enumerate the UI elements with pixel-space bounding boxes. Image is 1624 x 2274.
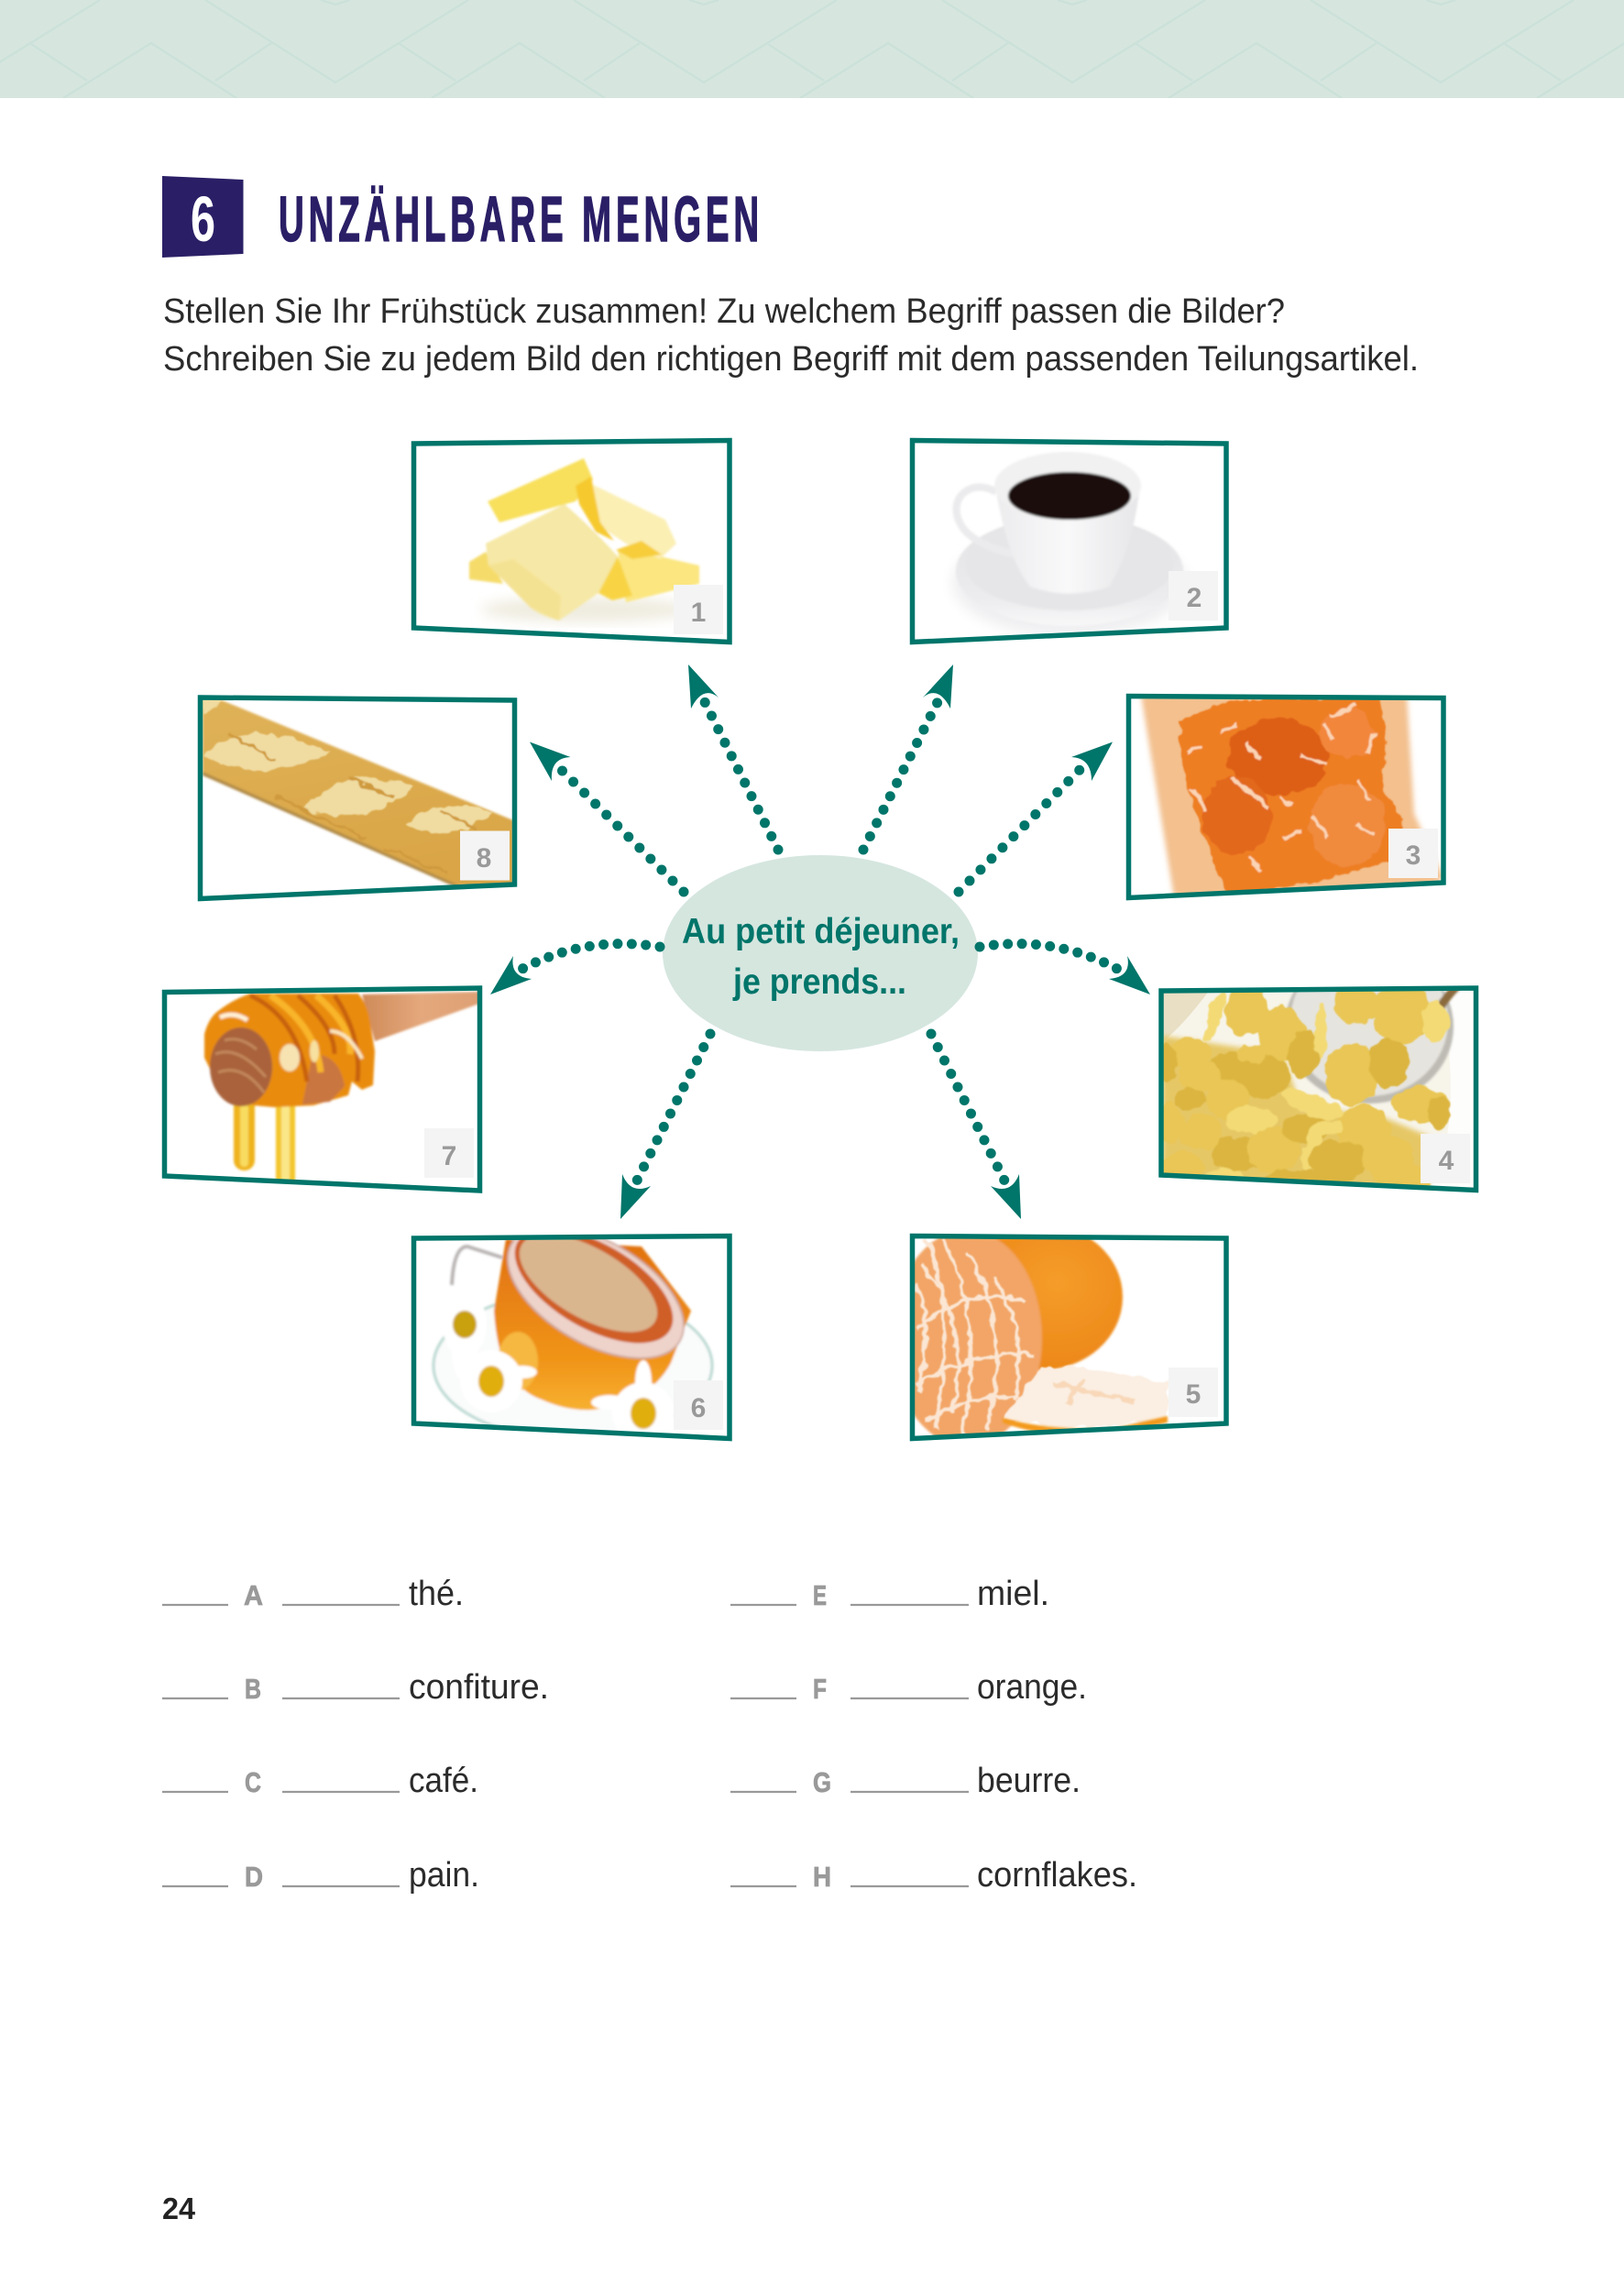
answer row B: B [245,1673,261,1705]
heading: UNZÄHLBARE MENGEN [279,183,759,255]
answer row F: F [813,1673,827,1705]
answer row G: beurre. [977,1762,1081,1800]
arrow to picture 3 [959,742,1113,892]
number tag 4 [1421,1134,1470,1183]
answer row G [730,1762,1081,1800]
central bubble [663,855,978,1051]
answer row D: pain. [409,1856,479,1895]
central bubble: je prends... [732,962,906,1002]
header band [0,0,1624,98]
answer row D: D [245,1861,263,1893]
answer row E: miel. [977,1575,1049,1613]
instructions: Stellen Sie Ihr Frühstück zusammen! Zu welchem Begriff passen die Bilder? [163,292,1285,331]
number tag 6: 6 [691,1393,706,1423]
number tag 4: 4 [1439,1146,1454,1176]
number tag 2: 2 [1187,583,1202,613]
answer row C: café. [409,1762,478,1800]
picture 4: cornflakes [1158,985,1479,1193]
picture 5: orange [909,1234,1229,1441]
number tag 8 [460,830,510,880]
answer row H: cornflakes. [977,1856,1137,1895]
arrow to picture 5 [931,1034,1021,1219]
number tag 3 [1388,829,1438,878]
exercise number badge: 6 [191,183,215,255]
answer row D [162,1856,479,1895]
answer row F: orange. [977,1668,1087,1707]
number tag 7 [424,1128,474,1178]
answer row C [162,1762,478,1800]
arrow to picture 7 [490,944,660,994]
picture 6: tea with daisies [411,1234,732,1441]
answer row C: C [245,1766,261,1798]
arrow to picture 6 [620,1034,710,1219]
answer row B: confiture. [409,1668,549,1707]
answer row F [730,1668,1087,1707]
exercise number badge [162,176,244,258]
picture 7: honey dipper [165,988,480,1191]
answer row H [730,1856,1137,1895]
number tag 7: 7 [442,1141,456,1171]
number tag 1: 1 [691,598,706,628]
answer row A: A [244,1579,263,1611]
central bubble: Au petit déjeuner, [682,912,960,951]
number tag 8: 8 [477,843,491,873]
number tag 5 [1169,1368,1218,1417]
number tag 2 [1169,571,1218,621]
answer row H: H [813,1861,831,1893]
answer row A: thé. [409,1575,464,1613]
number tag 1 [674,585,723,634]
answer row B [162,1668,549,1707]
answer row G: G [813,1766,831,1798]
arrow to picture 4 [980,944,1150,994]
answer row E: E [813,1579,827,1611]
answer row E [730,1575,1049,1613]
picture 2: coffee cup [913,440,1226,642]
number tag 3: 3 [1406,840,1421,871]
picture 3: toast with jam [1129,695,1443,903]
number tag 5: 5 [1186,1379,1201,1410]
picture 8: baguette [200,698,515,898]
arrow to picture 8 [530,742,684,892]
picture 1: butter [414,440,730,642]
arrow to picture 1 [688,665,778,850]
answer row A [162,1575,464,1613]
page number: 24 [162,2192,196,2225]
arrow to picture 2 [863,665,953,850]
instructions: Schreiben Sie zu jedem Bild den richtigen Begriff mit dem passenden Teilungsartikel. [163,340,1419,379]
number tag 6 [674,1380,723,1430]
instructions [163,292,1419,379]
